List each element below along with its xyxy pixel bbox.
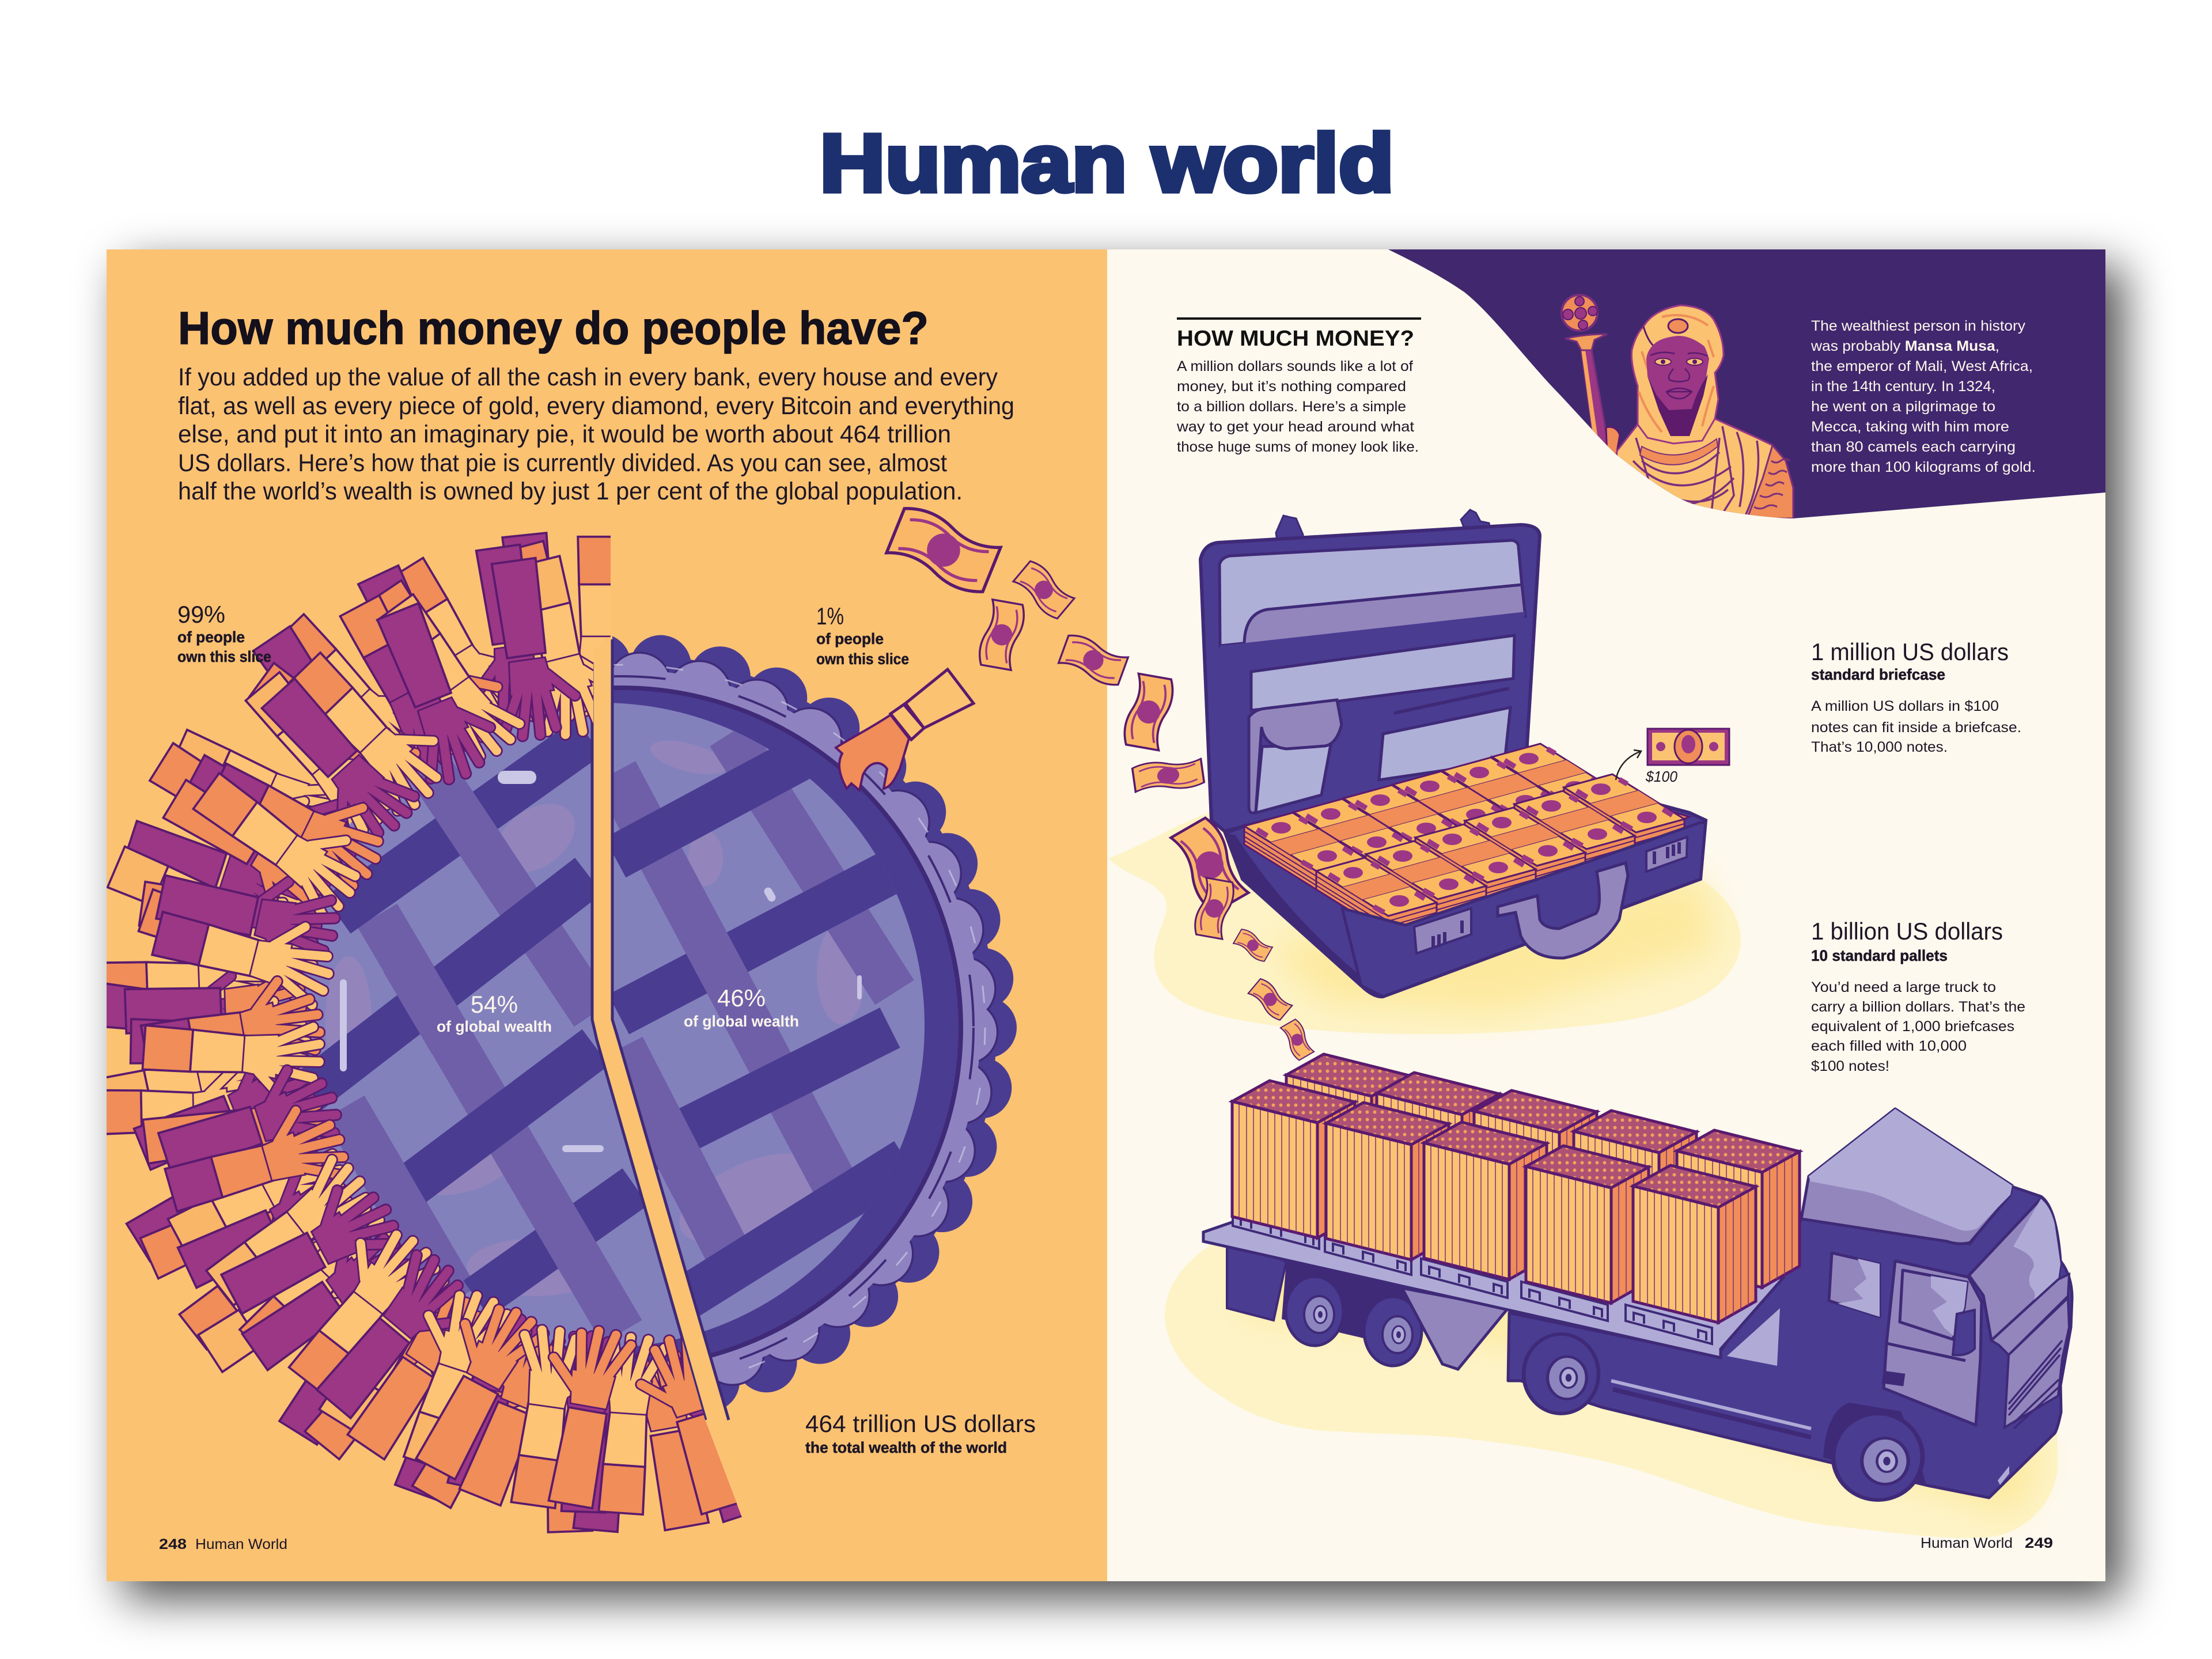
pie crust rim (right slice) [612, 635, 1017, 1407]
roof deflector [1801, 1109, 2012, 1244]
door panel [1884, 1261, 1982, 1425]
panel: left page background [107, 249, 1107, 1581]
money stacks [1244, 744, 1684, 934]
lattice crossings [374, 789, 740, 1267]
text block: how much money: those huge sums of money look like. [1177, 439, 1419, 455]
lid upper lining [1219, 540, 1524, 646]
page footer left: 248 [159, 1536, 187, 1552]
text block: one billion [1811, 918, 2025, 1074]
label: 99 per cent [177, 601, 271, 665]
robe sleeve [1747, 445, 1793, 518]
label: 1 per cent: 1% [816, 603, 844, 630]
door handle [1882, 1370, 1905, 1387]
text block: how much money: way to get your head around what [1176, 419, 1414, 435]
icon: sceptre [1562, 295, 1610, 455]
label: 1 per cent: of people [816, 630, 884, 647]
text block: one billion: You’d need a large truck to [1811, 979, 1996, 995]
cab and chassis [1508, 1187, 2072, 1498]
label: total wealth: the total wealth of the world [805, 1439, 1007, 1456]
rear wheels [1286, 1277, 1422, 1366]
label: 99 per cent: own this slice [177, 648, 271, 665]
illustration: truck with ten pallets [1203, 1054, 2072, 1500]
dark band [1215, 612, 1525, 674]
small side window [1829, 1253, 1880, 1317]
label: 1 per cent [816, 603, 909, 668]
intro text: If you added up the value of all the cash in every bank, every house and every [178, 363, 998, 391]
yellow shadow under truck [1165, 1238, 2058, 1538]
pallets [1233, 1210, 1712, 1344]
page footer right: 249 [2025, 1535, 2053, 1551]
intro text [178, 363, 1014, 505]
lattice strips [298, 734, 906, 1332]
label: 46 per cent: of global wealth [684, 1013, 799, 1030]
text block: Mansa Musa: The wealthiest person in history [1811, 318, 2026, 334]
front wheel [1833, 1414, 1923, 1500]
illustration: Mansa Musa [1562, 295, 1793, 518]
text block: one million [1811, 638, 2021, 755]
label: 99 per cent: of people [177, 628, 245, 646]
icon: 100 dollar note with arrow [1616, 729, 1729, 780]
windscreen [1969, 1199, 2061, 1340]
text block: one million: A million US dollars in $100 [1811, 698, 1999, 714]
heading: How much money do people have? [178, 302, 929, 354]
headlight [1998, 1466, 2009, 1485]
panel: right page background [1107, 249, 2105, 1581]
slice cut [590, 634, 729, 1420]
text block: one million: notes can fit inside a briefcase. [1811, 719, 2021, 736]
figure face [1646, 336, 1709, 436]
text block: Mansa Musa [1810, 318, 2036, 475]
page drop shadow [124, 267, 2123, 1599]
text block: how much money: HOW MUCH MONEY? [1177, 327, 1414, 351]
text block: Mansa Musa: was probably Mansa Musa , [1810, 338, 1999, 354]
label: 54 per cent [437, 991, 552, 1035]
mirror [1953, 1310, 1975, 1355]
illustration: open briefcase [1200, 510, 1706, 997]
figure turban [1631, 305, 1724, 444]
intro text: half the world’s wealth is owned by just 1 per cent of the global population. [178, 478, 963, 505]
money pallets back row [1286, 1054, 1800, 1287]
lock left [1414, 908, 1471, 953]
text block: how much money: to a billion dollars. Here’s a simple [1177, 399, 1406, 415]
wheel arch [1823, 1403, 1927, 1487]
label: 99 per cent: 99% [177, 601, 225, 628]
text block: Mansa Musa: more than 100 kilograms of gold. [1811, 459, 2036, 475]
text block: one million: That’s 10,000 notes. [1811, 739, 1948, 755]
page footer right: Human World [1921, 1535, 2013, 1551]
falling bank notes [884, 503, 1316, 1061]
text block: one billion: each filled with 10,000 [1811, 1038, 1967, 1054]
label: total wealth [805, 1410, 1036, 1456]
text block: Mansa Musa: Mecca, taking with him more [1811, 419, 2009, 435]
lid middle lining [1251, 635, 1514, 710]
panel: left page heading and intro [178, 302, 1014, 505]
briefcase lid [1200, 525, 1540, 831]
label: 46 per cent [684, 984, 799, 1030]
flatbed [1203, 1222, 1783, 1358]
text block: one billion: 1 billion US dollars [1811, 918, 2003, 945]
middle wheel [1524, 1334, 1599, 1414]
large side window [1900, 1270, 1967, 1339]
label: 1 per cent: own this slice [816, 650, 909, 668]
mudguard wedge [1402, 1288, 1508, 1369]
single hand on the small slice [836, 669, 974, 790]
label: 46 per cent: 46% [717, 984, 766, 1012]
text block: one billion: 10 standard pallets [1811, 947, 1948, 964]
text block: one billion: equivalent of 1,000 briefcases [1811, 1018, 2014, 1035]
text block: Mansa Musa: the emperor of Mali, West Africa, [1811, 358, 2033, 374]
roof deflector top [1809, 1109, 2012, 1231]
pie dark base [283, 690, 959, 1365]
figure eyes and features [1650, 353, 1707, 399]
robe stripes and necklaces [1630, 426, 1758, 518]
briefcase handle [1498, 863, 1628, 958]
page footer right [1921, 1535, 2053, 1551]
text block: how much money: A million dollars sounds like a lot of [1177, 358, 1413, 374]
text block: Mansa Musa: than 80 camels each carrying [1811, 439, 2016, 455]
lid lower lining right [1379, 707, 1510, 780]
label: 54 per cent: 54% [471, 991, 518, 1018]
lid small pocket [1249, 700, 1342, 813]
title: Human world [820, 118, 1394, 209]
lid pocket flap [1244, 585, 1525, 646]
label: total wealth: 464 trillion US dollars [805, 1410, 1036, 1437]
lid lower lining left [1256, 745, 1331, 813]
briefcase base [1225, 762, 1706, 997]
gap triangle [1727, 1308, 1780, 1366]
intro text: else, and put it into an imaginary pie, it would be worth about 464 trillion [178, 421, 951, 448]
text block: one billion: carry a billion dollars. That’s the [1811, 999, 2025, 1015]
side stripe [1611, 1381, 1811, 1429]
text block: Mansa Musa: he went on a pilgrimage to [1811, 399, 1995, 415]
intro text: US dollars. Here’s how that pie is currently divided. As you can see, almost [178, 449, 947, 477]
text block: Mansa Musa: in the 14th century. In 1324, [1811, 378, 1995, 395]
briefcase front wall [1342, 823, 1706, 997]
filling highlights [340, 771, 862, 1152]
pie filling and lattice [280, 703, 925, 1347]
rear chassis [1227, 1238, 1286, 1320]
money bed [1244, 762, 1690, 922]
panel: Mansa Musa background [1388, 249, 2105, 518]
figure robe [1613, 419, 1793, 518]
turban jewel [1668, 319, 1688, 333]
text block: how much money [1176, 317, 1421, 455]
hands reaching for the large slice [82, 531, 775, 1533]
label: 100 dollars: $100 [1645, 768, 1678, 785]
figure beard [1647, 374, 1708, 436]
yellow shadow under briefcase [1109, 809, 1741, 1034]
text block: one million: standard briefcase [1811, 666, 1945, 683]
text block: one billion: $100 notes! [1811, 1058, 1889, 1074]
label: 54 per cent: of global wealth [437, 1018, 552, 1035]
intro text: flat, as well as every piece of gold, every diamond, every Bitcoin and everything [178, 392, 1014, 420]
lock right [1646, 837, 1687, 872]
page footer left [159, 1536, 287, 1552]
front visor [1991, 1274, 2069, 1355]
text block: one million: 1 million US dollars [1811, 638, 2009, 665]
page footer left: Human World [195, 1536, 287, 1552]
grille panel [2005, 1298, 2069, 1427]
figure hand [1606, 427, 1620, 455]
money pallets front row [1232, 1081, 1756, 1323]
text block: how much money: money, but it’s nothing compared [1177, 378, 1406, 395]
hinges [1276, 510, 1491, 544]
chart: divided pie [82, 531, 997, 1533]
